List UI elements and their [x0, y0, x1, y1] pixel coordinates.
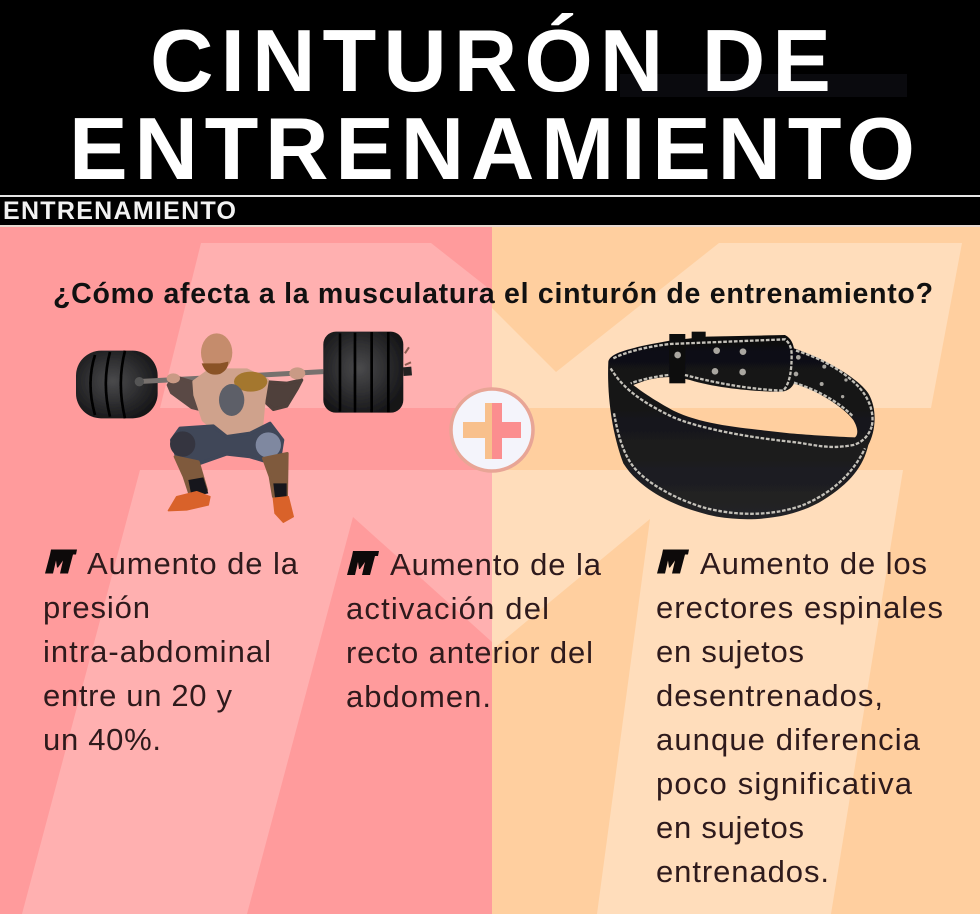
illustration: leather lifting belt [608, 332, 875, 519]
icon: M logo [347, 551, 379, 575]
icon: plus sign in circle [451, 389, 533, 471]
title [69, 11, 915, 198]
text block: column 3: Aumento de los [700, 546, 927, 581]
panel: left pink background [0, 227, 492, 914]
text block: column 3: entrenados. [656, 854, 829, 889]
text block: column 3: en sujetos [656, 810, 804, 845]
text block: column 3: erectores espinales [656, 590, 943, 625]
text block: column 3: aunque diferencia [656, 722, 921, 757]
text block: column 2: recto anterior del [346, 635, 593, 670]
icon: M logo [45, 550, 77, 574]
text block: column 1: un 40%. [43, 722, 161, 757]
text block: column 3: poco significativa [656, 766, 913, 801]
title: CINTURÓN DE [150, 11, 831, 110]
header band [0, 0, 980, 227]
illustration: weightlifter squatting with barbell [76, 332, 412, 522]
text block: column 1 [43, 546, 299, 757]
text block: column 2 [346, 547, 602, 714]
text block: column 1: presión [43, 590, 150, 625]
text block: column 1: entre un 20 y [43, 678, 232, 713]
text block: column 3 [656, 546, 943, 889]
title: ENTRENAMIENTO [69, 99, 915, 198]
text block: column 2: abdomen. [346, 679, 491, 714]
text block: column 3: en sujetos [656, 634, 804, 669]
text block: column 2: activación del [346, 591, 549, 626]
text block: column 1: intra-abdominal [43, 634, 271, 669]
section label: ENTRENAMIENTO [3, 197, 236, 225]
text block: column 2: Aumento de la [390, 547, 602, 582]
text block: column 1: Aumento de la [87, 546, 299, 581]
question heading: ¿Cómo afecta a la musculatura el cinturón de entrenamiento? [53, 278, 933, 310]
panel: right orange background [492, 227, 980, 914]
text block: column 3: desentrenados, [656, 678, 883, 713]
icon: M logo [657, 550, 689, 574]
